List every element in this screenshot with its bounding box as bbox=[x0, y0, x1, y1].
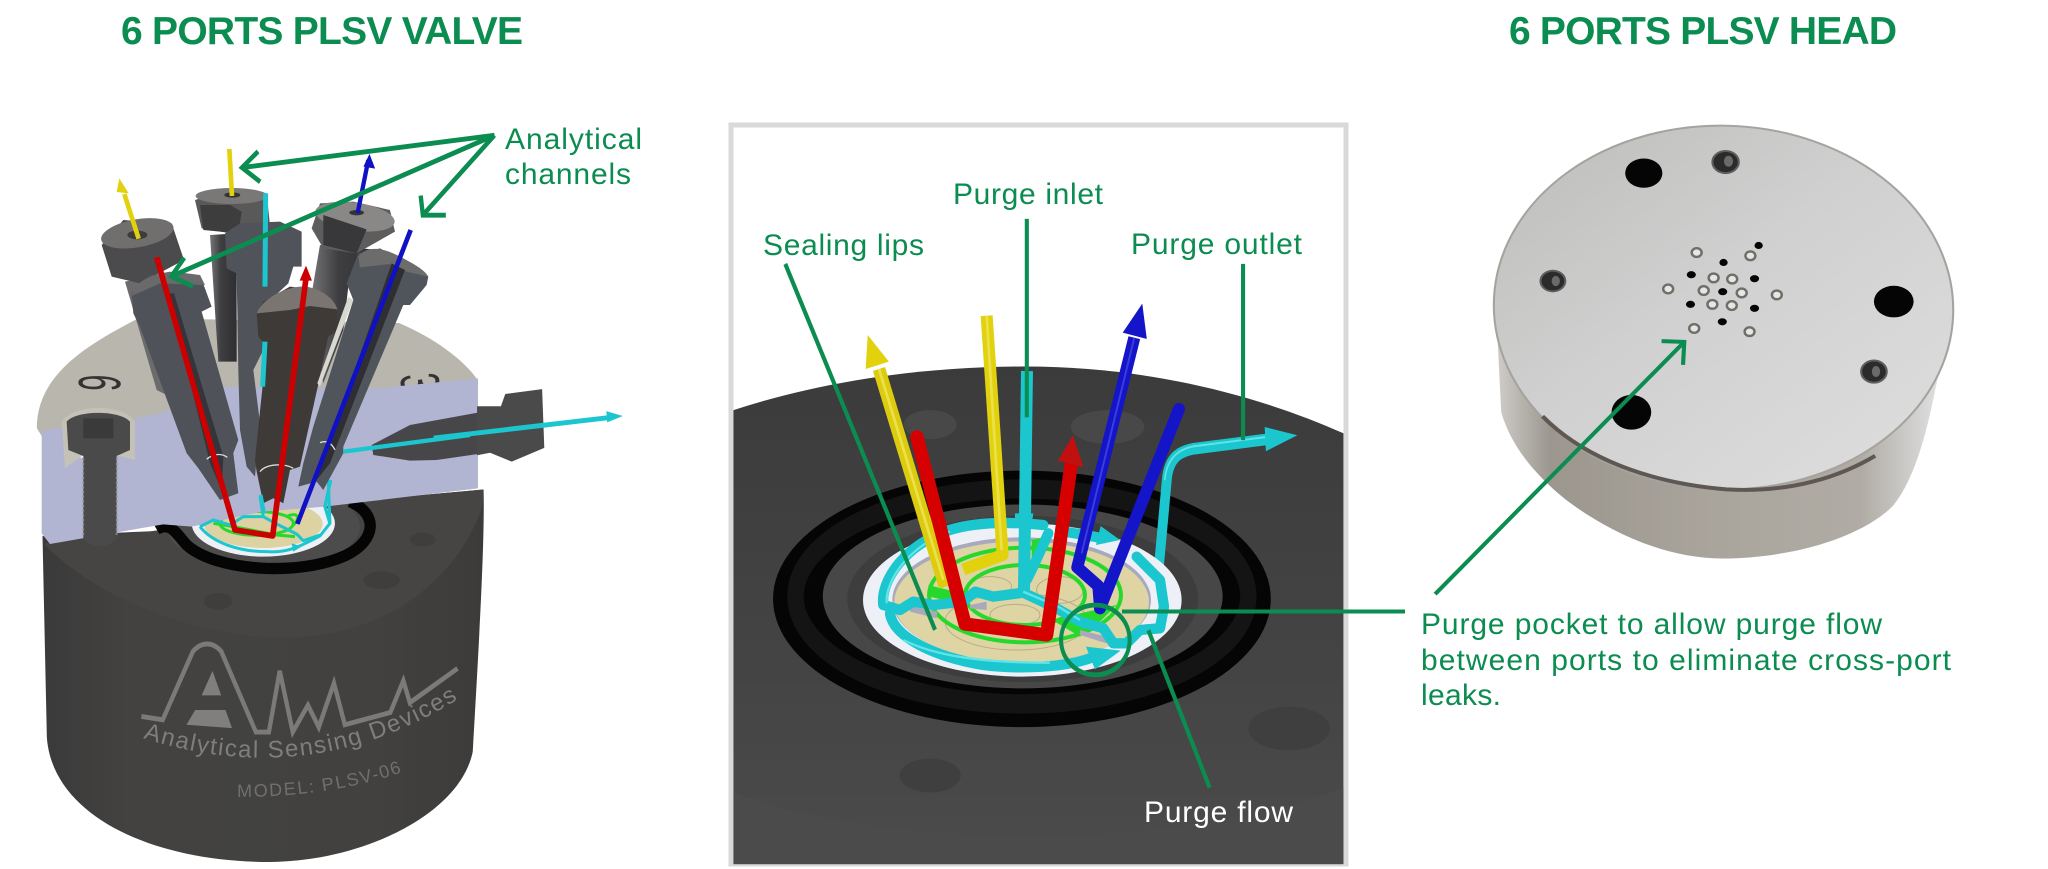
sealing lips bbox=[929, 548, 1121, 642]
sealing lips bbox=[213, 511, 298, 537]
white seat bbox=[863, 523, 1182, 677]
label: sealing lips: Sealing lips bbox=[763, 229, 924, 262]
head side wall bbox=[1496, 306, 1953, 559]
purge flow highlight bbox=[887, 532, 1080, 663]
purge flow channels bbox=[883, 523, 1164, 667]
purge outlet tube bbox=[343, 435, 470, 452]
title: 6 ports PLSV valve: 6 PORTS PLSV VALVE bbox=[121, 10, 523, 53]
o-ring bbox=[773, 471, 1271, 727]
bolt front right bbox=[298, 248, 428, 490]
bolt back right bbox=[310, 197, 397, 383]
disk lower bevel bbox=[733, 788, 1343, 864]
label: purge outlet: Purge outlet bbox=[1131, 228, 1303, 261]
analytical channel red bbox=[157, 257, 306, 536]
port number 3: 3 bbox=[388, 370, 452, 394]
label: analytical channels: channels bbox=[505, 158, 631, 191]
logo mark bbox=[141, 644, 458, 732]
arrowheads bbox=[606, 411, 623, 422]
purge pocket circle bbox=[1061, 605, 1130, 675]
black ports bbox=[1686, 242, 1763, 325]
leader: sealing lips bbox=[785, 264, 935, 630]
PLSV head photo bbox=[1435, 118, 1960, 594]
white seat bbox=[192, 490, 335, 557]
valve lower body bbox=[43, 490, 484, 862]
label: purge pocket description: between ports to eliminate cross-port bbox=[1421, 644, 1952, 677]
leader: purge pocket bbox=[1122, 610, 1405, 614]
threaded holes bbox=[1540, 151, 1887, 383]
analytical channel blue bbox=[297, 230, 411, 524]
disk holes bbox=[904, 410, 1144, 444]
beige valve surface bbox=[204, 500, 323, 548]
analytical channel yellow bbox=[124, 149, 232, 239]
valve illustration bbox=[36, 148, 623, 862]
purge arrowheads bbox=[1086, 526, 1121, 669]
bolt front left bbox=[132, 272, 238, 500]
purge inlet tube bbox=[1024, 371, 1027, 590]
bolt far left bbox=[99, 213, 190, 397]
valve seat detail bbox=[863, 316, 1182, 677]
leader: purge outlet bbox=[1238, 264, 1248, 440]
model text bbox=[237, 772, 403, 797]
title: 6 ports PLSV head: 6 PORTS PLSV HEAD bbox=[1509, 10, 1897, 53]
leader: purge flow bbox=[1148, 630, 1210, 788]
o-ring bbox=[157, 502, 370, 569]
fitting end bbox=[477, 389, 544, 462]
upper block top surface bbox=[37, 318, 478, 453]
logo text bbox=[143, 698, 460, 758]
purge tubes in valve bbox=[261, 193, 331, 523]
lavender cut face bbox=[42, 378, 478, 544]
callout: analytical channels bbox=[171, 123, 642, 286]
label: purge flow: Purge flow bbox=[1144, 796, 1293, 829]
dark disk bbox=[733, 367, 1343, 864]
valve illustration: MODEL: PLSV-06 bbox=[238, 762, 400, 797]
beige surface bbox=[892, 537, 1151, 663]
body top bevel bbox=[43, 490, 484, 638]
bolt centre back bbox=[225, 222, 302, 477]
valve cavity bbox=[167, 484, 360, 569]
bolt back centre bbox=[195, 188, 270, 362]
right fitting bbox=[372, 412, 483, 461]
label: purge pocket description: Purge pocket to allow purge flow bbox=[1421, 608, 1882, 641]
red arrowhead bbox=[1058, 435, 1084, 467]
inner recesses bbox=[945, 577, 1088, 650]
label: purge inlet: Purge inlet bbox=[953, 178, 1104, 211]
bolt tips bbox=[207, 442, 335, 472]
panel: purge detail frame bbox=[731, 125, 1346, 864]
head rim shadow bbox=[1543, 416, 1875, 490]
blue arrowhead bbox=[1123, 304, 1147, 339]
valve illustration: Analytical Sensing Devices bbox=[143, 690, 456, 758]
port number 6: 6 bbox=[66, 374, 134, 392]
large holes bbox=[1612, 159, 1914, 430]
red channel bbox=[917, 437, 1071, 635]
leader: purge inlet bbox=[1022, 219, 1032, 417]
purge flow channel left view bbox=[200, 480, 330, 552]
mounting holes on body bbox=[204, 533, 436, 610]
side screw bbox=[62, 408, 135, 546]
label: analytical channels: Analytical bbox=[505, 123, 642, 156]
yellow channels bbox=[879, 369, 945, 587]
purge outlet tube bbox=[1159, 427, 1297, 570]
head top plate bbox=[1487, 118, 1960, 497]
lavender pads bbox=[910, 602, 1107, 643]
label: purge pocket description: leaks. bbox=[1421, 679, 1501, 712]
bolt front centre bbox=[255, 286, 338, 503]
yellow arrowhead bbox=[866, 335, 889, 369]
arrow: to purge pocket bbox=[1435, 341, 1684, 594]
blue channels bbox=[1077, 338, 1134, 607]
silver ports bbox=[1663, 248, 1782, 336]
